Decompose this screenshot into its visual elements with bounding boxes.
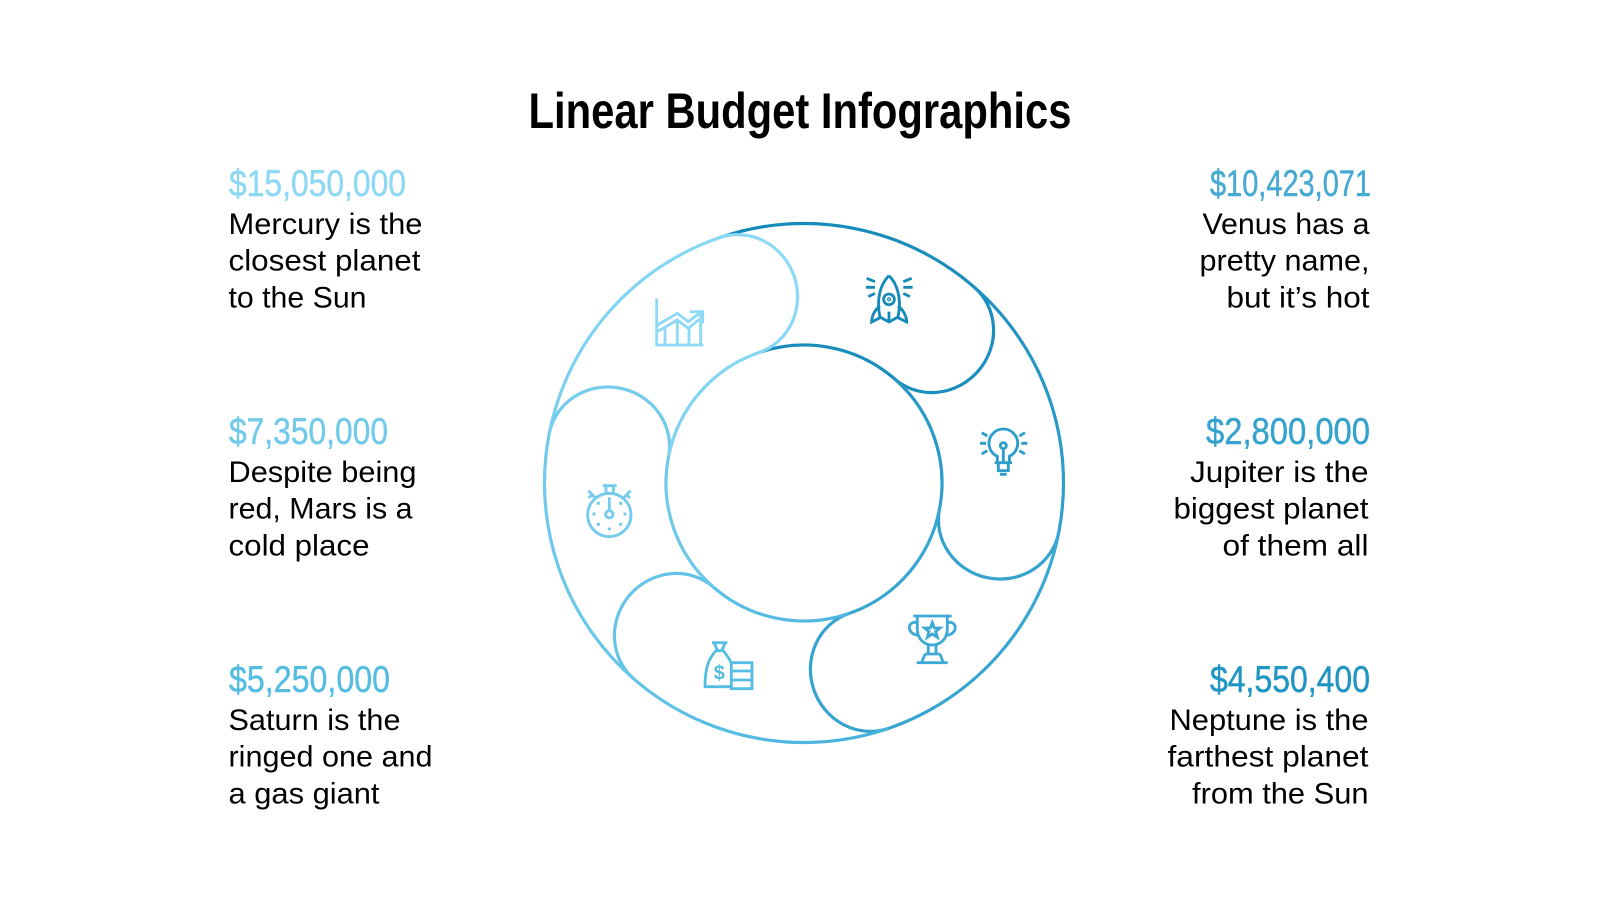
icon: stopwatch: [588, 486, 631, 537]
value: $7,350,000: [229, 411, 388, 452]
description: Venus has a: [1202, 208, 1370, 241]
description: closest planet: [228, 245, 421, 278]
value: $5,250,000: [229, 659, 390, 700]
description: farthest planet: [1168, 741, 1369, 774]
block: Mars: [228, 411, 416, 562]
description: of them all: [1222, 529, 1368, 562]
description: a gas giant: [228, 777, 380, 810]
value: $10,423,071: [1210, 163, 1371, 204]
description: Despite being: [228, 456, 416, 489]
description: [1200, 208, 1370, 314]
block: Jupiter: [1174, 411, 1370, 562]
value: $15,050,000: [229, 163, 406, 204]
ring diagram: [545, 223, 1063, 743]
description: red, Mars is a: [228, 493, 413, 526]
description: biggest planet: [1174, 493, 1369, 526]
value: $2,800,000: [1206, 411, 1370, 452]
segment: light bulb: [895, 287, 1063, 579]
block: Venus: [1200, 163, 1371, 314]
description: Jupiter is the: [1190, 456, 1368, 489]
segment: chart: [549, 235, 798, 457]
icon: money bag and stack: $: [714, 662, 725, 684]
segment: money bag: [614, 573, 888, 743]
icon: rocket: [866, 276, 913, 323]
description: to the Sun: [228, 281, 366, 314]
description: [1174, 456, 1369, 562]
block: Neptune: [1168, 659, 1370, 810]
description: Neptune is the: [1170, 704, 1368, 737]
icon: trophy: [909, 616, 955, 663]
description: [228, 208, 422, 314]
icon: growth chart: [657, 298, 703, 345]
description: Mercury is the: [228, 208, 422, 241]
block: Saturn: [228, 659, 432, 810]
description: Saturn is the: [228, 704, 400, 737]
description: ringed one and: [228, 741, 432, 774]
description: from the Sun: [1192, 777, 1368, 810]
title: Linear Budget Infographics: [528, 83, 1072, 139]
description: pretty name,: [1200, 245, 1370, 278]
segment: rocket: [720, 223, 994, 393]
description: [228, 456, 416, 562]
block: Mercury: [228, 163, 422, 314]
segment: trophy: [810, 509, 1059, 731]
description: but it’s hot: [1226, 281, 1370, 314]
description: [1168, 704, 1369, 810]
value: $4,550,400: [1210, 659, 1370, 700]
segment: stopwatch: [545, 387, 713, 679]
icon: light bulb: [980, 429, 1027, 474]
description: cold place: [228, 529, 370, 562]
description: [228, 704, 432, 810]
icon: money bag and stack: [705, 643, 752, 689]
